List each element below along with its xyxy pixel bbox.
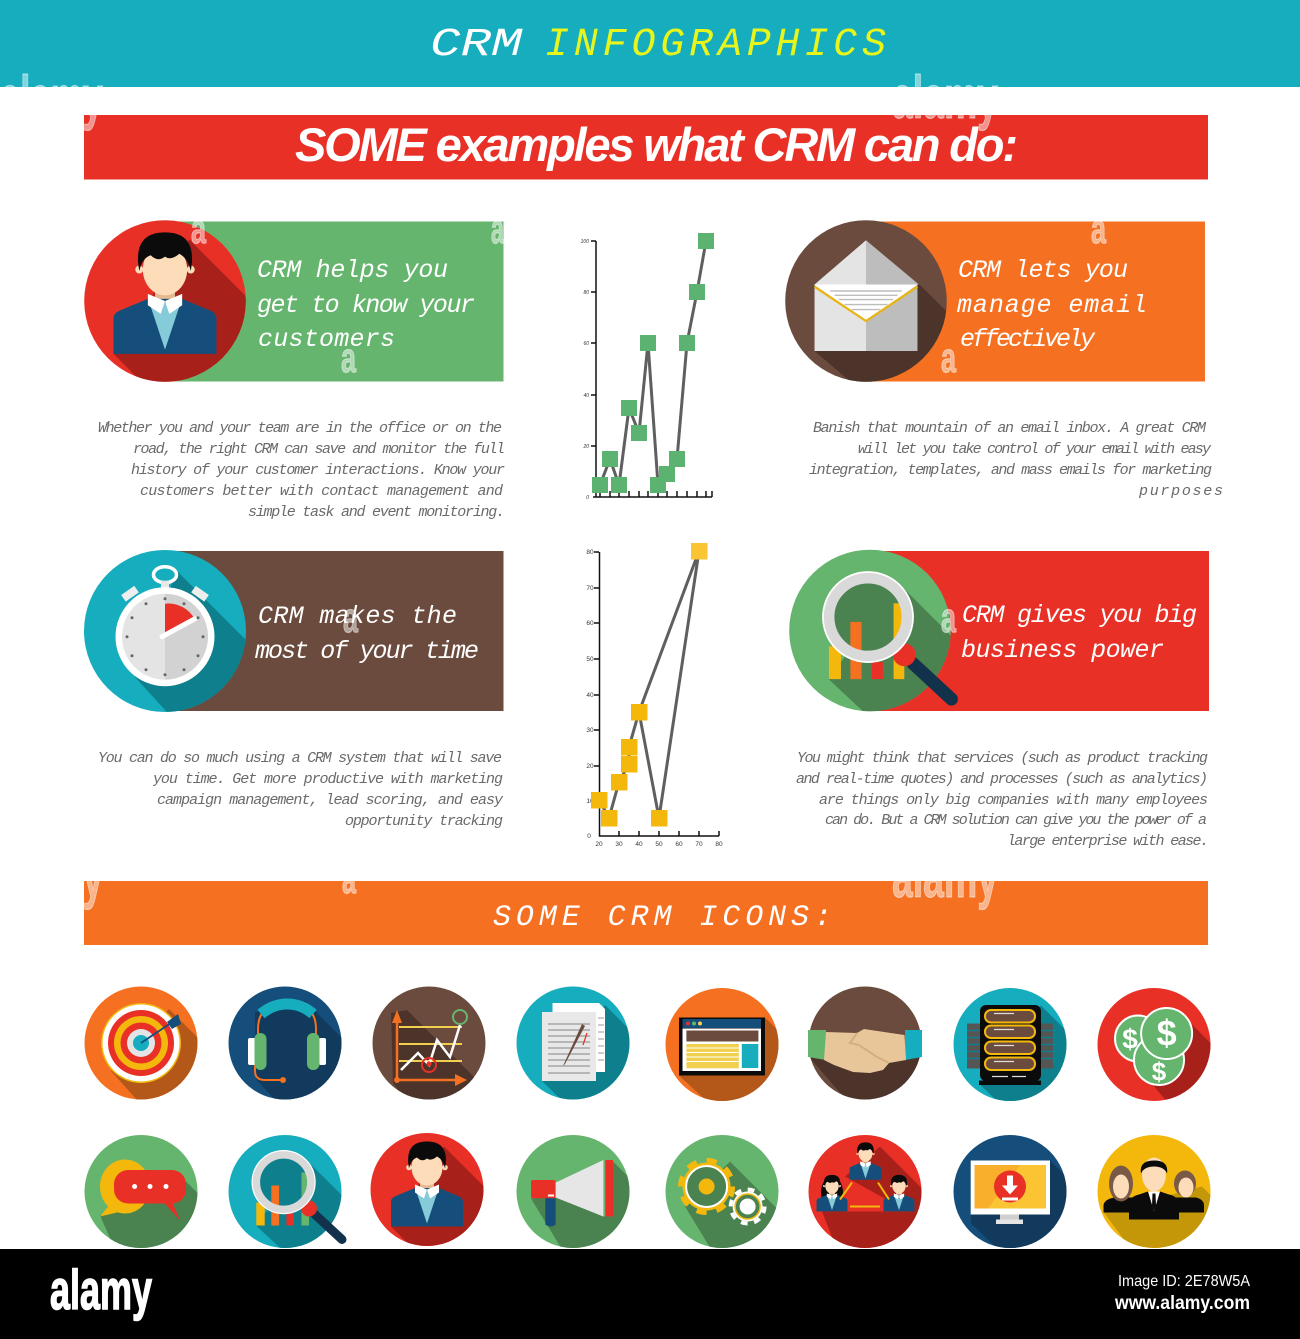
watermark fragments: alamy xyxy=(892,843,998,910)
icon: chat bubbles xyxy=(84,1135,198,1248)
line chart: yellow: 50 xyxy=(655,841,663,848)
text: power description: can do. But a CRM solution can give you the power of a xyxy=(825,812,1207,829)
text: power description: are things only big companies with many employees xyxy=(819,792,1208,809)
watermark fragments: a xyxy=(342,855,356,902)
line chart: yellow: 60 xyxy=(675,841,683,848)
icon: money coins: $ xyxy=(1152,1056,1167,1086)
line chart: yellow: 80 xyxy=(715,841,723,848)
line chart: green: 40 xyxy=(583,393,589,399)
icon: money coins: $ xyxy=(1157,1012,1177,1054)
watermark fragments: alamy xyxy=(892,64,998,131)
line chart: green: 100 xyxy=(581,239,589,245)
line chart: yellow: 70 xyxy=(695,841,703,848)
line chart: yellow: 70 xyxy=(586,585,594,592)
line chart: green: 80 xyxy=(583,290,589,296)
icon: download monitor xyxy=(954,1135,1066,1248)
line chart: green: 60 xyxy=(583,341,589,347)
watermark fragments: a xyxy=(491,205,504,252)
icon: growth chart xyxy=(372,986,486,1100)
text: customers description: Whether you and your team are in the office or on the xyxy=(98,420,502,437)
text: time description: you time. Get more productive with marketing xyxy=(152,771,503,788)
icon: money coins xyxy=(1098,988,1210,1101)
watermark fragments: a xyxy=(341,334,356,381)
panel heading: CRM gives you big xyxy=(962,601,1197,630)
title highlight: INFOGRAPHICS xyxy=(545,23,886,68)
watermark fragments xyxy=(0,64,1106,910)
line chart: yellow: 30 xyxy=(615,841,623,848)
bar text: SOME CRM ICONS: xyxy=(493,901,832,935)
line chart: yellow: 80 xyxy=(586,549,594,556)
footer logo: alamy xyxy=(50,1258,152,1321)
icon: headset xyxy=(228,986,342,1100)
line chart: yellow xyxy=(586,543,723,848)
text: power description: You might think that services (such as product tracking xyxy=(797,750,1208,767)
text: email description: will let you take control of your email with easy xyxy=(858,441,1212,458)
watermark fragments: alamy xyxy=(0,843,103,910)
text: customers description: history of your customer interactions. Know your xyxy=(131,462,505,479)
watermark fragments: a xyxy=(941,334,956,381)
line chart: yellow: 40 xyxy=(586,692,594,699)
text: time description: You can do so much using a CRM system that will save xyxy=(98,750,502,767)
footer bar xyxy=(0,1249,1300,1339)
website: www.alamy.com xyxy=(1114,1293,1250,1314)
panel: know your customers xyxy=(84,220,504,382)
icon: documents xyxy=(516,986,630,1100)
icon: team network xyxy=(808,1135,922,1248)
panel heading: manage email xyxy=(957,291,1147,320)
text: email description xyxy=(809,420,1223,500)
panel heading: get to know your xyxy=(257,291,475,320)
line chart: yellow: 10 xyxy=(586,798,594,805)
panel heading: effectively xyxy=(960,325,1096,354)
text: email description: Banish that mountain of an email inbox. A great CRM xyxy=(813,420,1207,437)
icon: server xyxy=(954,988,1066,1101)
icon: customer avatar xyxy=(84,220,246,382)
panel heading xyxy=(255,602,479,666)
icon: megaphone xyxy=(516,1135,630,1248)
icon: envelope xyxy=(785,220,947,382)
icon: business group xyxy=(1098,1135,1210,1248)
line chart: green xyxy=(581,233,714,501)
icon: customer xyxy=(370,1133,484,1246)
icon: money coins: $ xyxy=(1122,1024,1138,1054)
text: power description: large enterprise with ease. xyxy=(1007,833,1209,850)
text: customers description: simple task and event monitoring. xyxy=(248,504,505,521)
watermark fragments: a xyxy=(1091,205,1106,252)
panel heading: CRM makes the xyxy=(258,602,457,631)
panel: big business power xyxy=(789,550,1209,712)
panel heading xyxy=(257,256,475,354)
icon: browser window xyxy=(666,988,778,1101)
icon: stopwatch xyxy=(84,550,246,712)
title: CRM xyxy=(430,23,523,68)
text: time description: opportunity tracking xyxy=(345,813,503,830)
panel heading: CRM lets you xyxy=(958,256,1128,285)
line chart: yellow: 20 xyxy=(595,841,603,848)
icon: gears xyxy=(666,1135,778,1248)
line chart: yellow: 60 xyxy=(586,620,594,627)
watermark fragments: alamy xyxy=(0,64,103,131)
panel heading: most of your time xyxy=(255,637,479,666)
line chart: yellow: 30 xyxy=(586,727,594,734)
text: customers description: customers better with contact management and xyxy=(140,483,503,500)
panel: manage email xyxy=(785,220,1205,382)
text: email description: integration, templates, and mass emails for marketing xyxy=(809,462,1212,479)
icon: magnifier with bar chart xyxy=(789,550,958,712)
panel heading: customers xyxy=(258,325,395,354)
text: email description: purposes xyxy=(1138,483,1223,500)
line chart: yellow: 20 xyxy=(586,763,594,770)
red heading bar xyxy=(84,115,1208,180)
watermark fragments: a xyxy=(941,594,956,641)
line chart: yellow: 40 xyxy=(635,841,643,848)
icon: handshake xyxy=(808,986,925,1103)
panel heading xyxy=(961,601,1197,665)
watermark fragments: a xyxy=(191,205,206,252)
panel: make the most of your time xyxy=(84,550,504,721)
icon: target xyxy=(84,986,198,1100)
text: time description: campaign management, lead scoring, and easy xyxy=(157,792,504,809)
text: customers description: road, the right CRM can save and monitor the full xyxy=(133,441,505,458)
line chart: green: 20 xyxy=(582,444,589,450)
orange heading bar xyxy=(84,881,1208,945)
line chart: yellow: 50 xyxy=(586,656,594,663)
panel heading: business power xyxy=(961,636,1164,665)
line chart: yellow: 0 xyxy=(587,833,591,840)
icon: magnifier analytics xyxy=(228,1135,346,1248)
text: time description xyxy=(98,750,504,830)
image id: Image ID: 2E78W5A xyxy=(1118,1273,1250,1290)
panel heading: CRM helps you xyxy=(257,256,448,285)
line chart: green: 0 xyxy=(586,495,589,501)
text: power description xyxy=(796,750,1209,850)
panel heading xyxy=(957,256,1147,354)
text: power description: and real-time quotes) and processes (such as analytics) xyxy=(796,771,1208,788)
watermark fragments: a xyxy=(343,594,358,641)
top banner xyxy=(0,0,1300,87)
heading text: SOME examples what CRM can do: xyxy=(295,118,1018,171)
text: customers description xyxy=(98,420,505,521)
